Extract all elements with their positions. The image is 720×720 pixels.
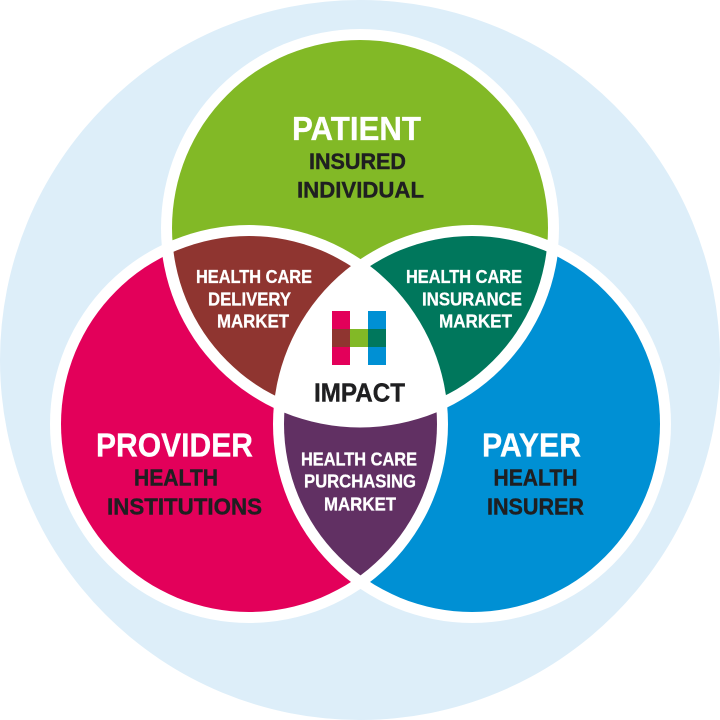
panel: patient circle segment bbox=[172, 40, 548, 260]
text block: provider: PROVIDER bbox=[96, 426, 253, 464]
white venn backing bbox=[50, 29, 671, 623]
text block: purchasing market: MARKET bbox=[324, 494, 396, 514]
text block: patient: INSURED bbox=[309, 149, 406, 174]
icon: H logo bbox=[332, 311, 386, 365]
text block: purchasing market: PURCHASING bbox=[304, 472, 416, 492]
text block: provider: INSTITUTIONS bbox=[107, 494, 262, 520]
panel: provider circle segment bbox=[61, 257, 351, 612]
text block: payer: INSURER bbox=[487, 494, 584, 520]
heading: impact: IMPACT bbox=[314, 378, 405, 408]
panel: health care insurance market overlap bbox=[370, 236, 546, 396]
text block: delivery market bbox=[196, 267, 312, 332]
text block: patient bbox=[292, 110, 424, 202]
panel: payer circle segment bbox=[370, 256, 660, 612]
panel: health care purchasing market overlap bbox=[284, 412, 437, 576]
text block: payer bbox=[482, 426, 584, 520]
text block: delivery market: MARKET bbox=[217, 312, 289, 332]
text block: insurance market bbox=[406, 267, 522, 332]
panel: health care delivery market overlap bbox=[174, 236, 351, 396]
text block: insurance market: HEALTH CARE bbox=[406, 267, 522, 287]
text block: purchasing market: HEALTH CARE bbox=[301, 450, 417, 470]
text block: payer: HEALTH bbox=[494, 464, 578, 490]
text block: provider: HEALTH bbox=[134, 464, 218, 490]
text block: purchasing market bbox=[301, 450, 417, 514]
text block: provider bbox=[96, 426, 262, 520]
text block: delivery market: HEALTH CARE bbox=[196, 267, 312, 287]
text block: insurance market: MARKET bbox=[439, 312, 512, 332]
text block: delivery market: DELIVERY bbox=[208, 290, 291, 310]
text block: payer: PAYER bbox=[482, 426, 581, 464]
text block: patient: INDIVIDUAL bbox=[297, 178, 424, 202]
text block: patient: PATIENT bbox=[292, 110, 421, 147]
text block: insurance market: INSURANCE bbox=[422, 290, 522, 310]
